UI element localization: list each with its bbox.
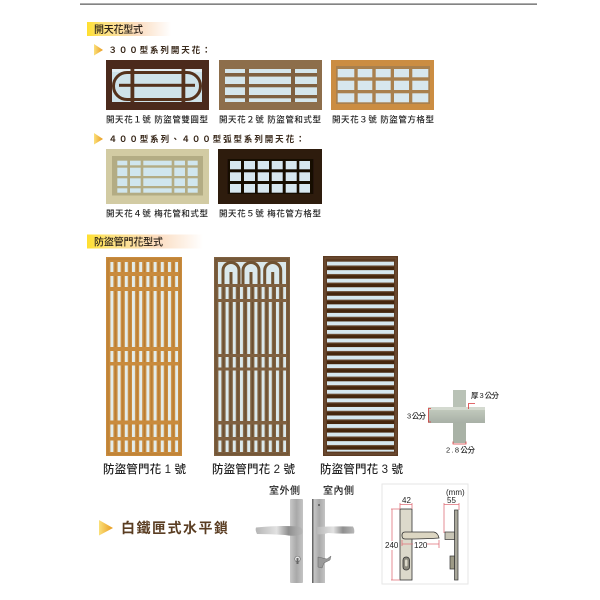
door 3 label: 防盜管門花 3 號 [320,462,404,476]
side view [445,510,458,580]
dimension marks [428,404,475,444]
label: thickness 3 cm: 厚 3 公分 [471,391,500,400]
lock photo: outdoor handle [256,499,303,583]
subheading: 300 series: ３００型系列開天花： [108,45,210,55]
subheading: 400 series: ４００型系列、４００型弧型系列開天花： [108,134,304,144]
window 3: square grid pattern [331,60,434,110]
door pattern 1 [106,257,182,456]
window 4: plum tube Japanese style [106,149,209,204]
front view plate and handle [400,509,439,580]
unit: mm: (mm) [446,488,465,497]
door pattern 3 [323,256,398,456]
label: width 2.8 cm: 2 . 8 公分 [446,446,476,454]
label: outdoor side: 室外側 [269,484,300,497]
arch panel [218,262,286,284]
heading: stainless mortise lock: 白鐵匣式水平鎖 [121,520,228,536]
caption: window 2: 開天花２號 防盜管和式型 [219,114,321,124]
heading: 防盜管門花型式: 防盜管門花型式 [94,236,163,248]
heading: 開天花型式: 開天花型式 [94,23,143,36]
door 2 label: 防盜管門花 2 號 [212,462,296,476]
dimension: 42: 42 [402,496,411,505]
window 1: double-round pattern [106,60,209,110]
door pattern 2 [214,257,290,456]
caption: window 4: 開天花４號 梅花管和式型 [106,208,208,218]
red dimension lines [391,503,459,580]
heading: 開天花型式 [87,22,171,36]
heading: 防盜管門花型式 [87,234,203,248]
label: indoor side: 室內側 [323,484,354,497]
caption: window 5: 開天花５號 梅花管方格型 [219,208,321,218]
dimension: 55: 55 [447,496,456,505]
door 1 label: 防盜管門花 1 號 [103,462,186,476]
caption: window 1: 開天花１號 防盜管雙圓型 [106,114,208,124]
lock photo: indoor handle [312,499,354,583]
tube cross-section diagram [407,390,500,454]
window 2: Japanese style pattern [219,60,322,110]
caption: window 3: 開天花３號 防盜管方格型 [332,114,434,124]
top rule [80,3,537,5]
label: height 3 cm: 3 公分 [407,412,426,420]
lock dimension drawing [382,484,468,584]
dimension: 240: 240 [385,541,399,550]
dimension: 120: 120 [414,541,428,550]
cross tube [428,390,485,443]
window 5: plum tube square grid [218,149,322,204]
